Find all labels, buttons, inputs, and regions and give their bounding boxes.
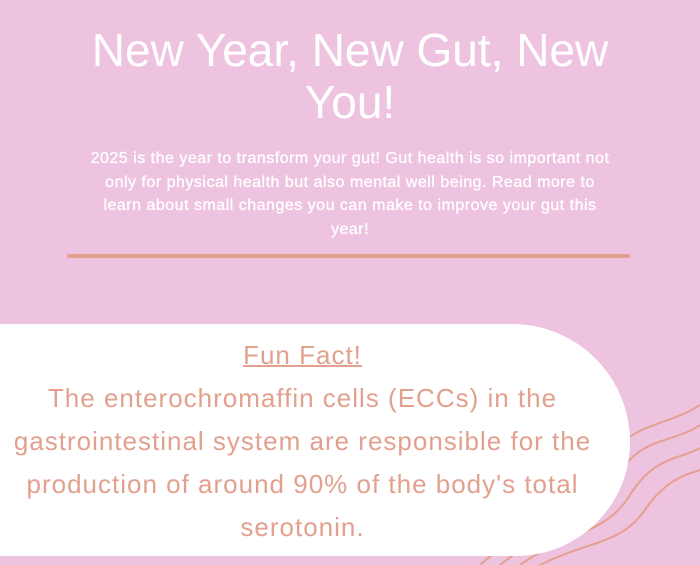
fun fact text: Fun Fact! [243, 340, 362, 370]
intro text [91, 150, 609, 238]
title [92, 24, 608, 128]
fun fact text: serotonin. [240, 512, 365, 542]
intro text: 2025 is the year to transform your gut! Gut health is so important not [91, 150, 609, 167]
title: You! [305, 76, 395, 128]
fun fact text [14, 340, 591, 542]
divider line [67, 254, 630, 258]
intro text: year! [331, 220, 369, 238]
fun fact text: The enterochromaffin cells (ECCs) in the [48, 383, 557, 413]
title: New Year, New Gut, New [92, 24, 608, 76]
fun fact text: production of around 90% of the body's total [26, 469, 578, 499]
fun fact text: gastrointestinal system are responsible for the [14, 426, 591, 456]
panel: fun fact card [0, 324, 630, 556]
intro text: learn about small changes you can make to improve your gut this [103, 197, 597, 214]
intro text: only for physical health but also mental well being. Read more to [105, 174, 595, 190]
